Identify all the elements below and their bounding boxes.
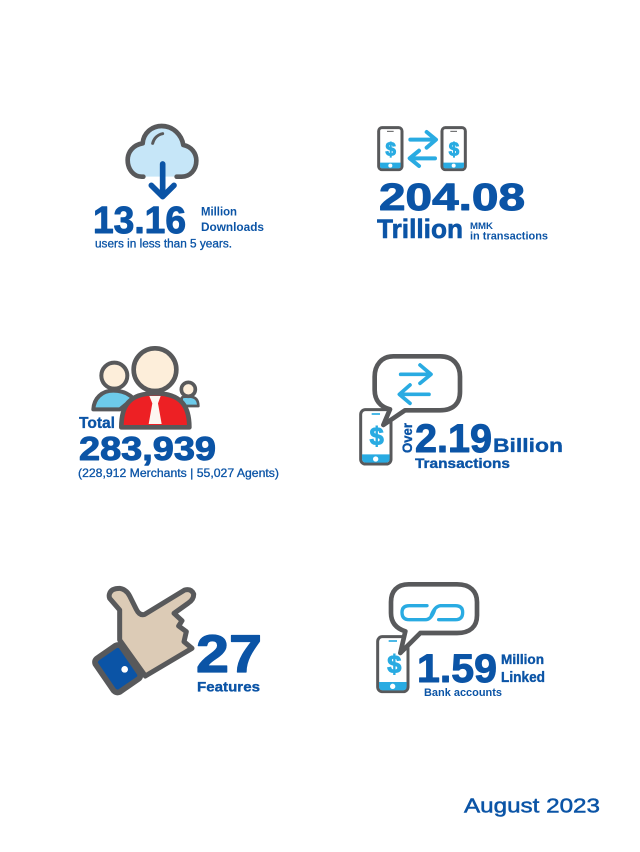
stat number: 283,939 [79,430,216,467]
label: transactions: Transactions [415,455,510,471]
panel: transaction value [377,128,548,244]
icon: phones exchanging money: $ [449,138,460,159]
icon: phones exchanging money [379,128,465,170]
label: features: Features [197,678,260,694]
icon: phone with speech bubble: $ [370,422,384,450]
caption: breakdown: (228,912 Merchants | 55,027 Agents) [78,466,279,480]
icon: phones exchanging money: $ [385,138,396,159]
label: million: Million [501,651,544,667]
label: MMK: MMK [470,221,493,232]
panel: transaction count [361,356,563,471]
panel: merchants and agents [78,348,279,480]
icon: phone with link bubble [378,584,477,692]
stat number: 13.16 [93,200,186,242]
icon: phone with speech bubble [361,356,460,464]
panel: downloads [93,126,264,250]
label: million downloads: Million [201,206,237,218]
date: August 2023 [464,794,600,818]
panel: linked accounts [378,584,545,699]
panel: features [95,588,262,694]
icon: cloud download [128,126,196,197]
caption: users in less than 5 years. [95,238,232,250]
label: bank accounts: Bank accounts [424,687,502,699]
stat number: 27 [196,625,262,684]
icon: pointing hand [95,588,194,692]
label: over (rotated): Over [399,422,415,453]
stat number: 1.59 [417,647,497,691]
stat number: 204.08 [379,177,525,219]
label: downloads: Downloads [201,222,264,234]
label: trillion: Trillion [377,214,463,244]
label: total: Total [79,415,115,432]
icon: people [93,348,198,427]
label: in transactions: in transactions [470,230,548,242]
label: billion: Billion [493,435,563,457]
icon: phone with link bubble: $ [387,650,401,678]
stat number: 2.19 [415,417,492,461]
label: linked: Linked [501,669,545,686]
